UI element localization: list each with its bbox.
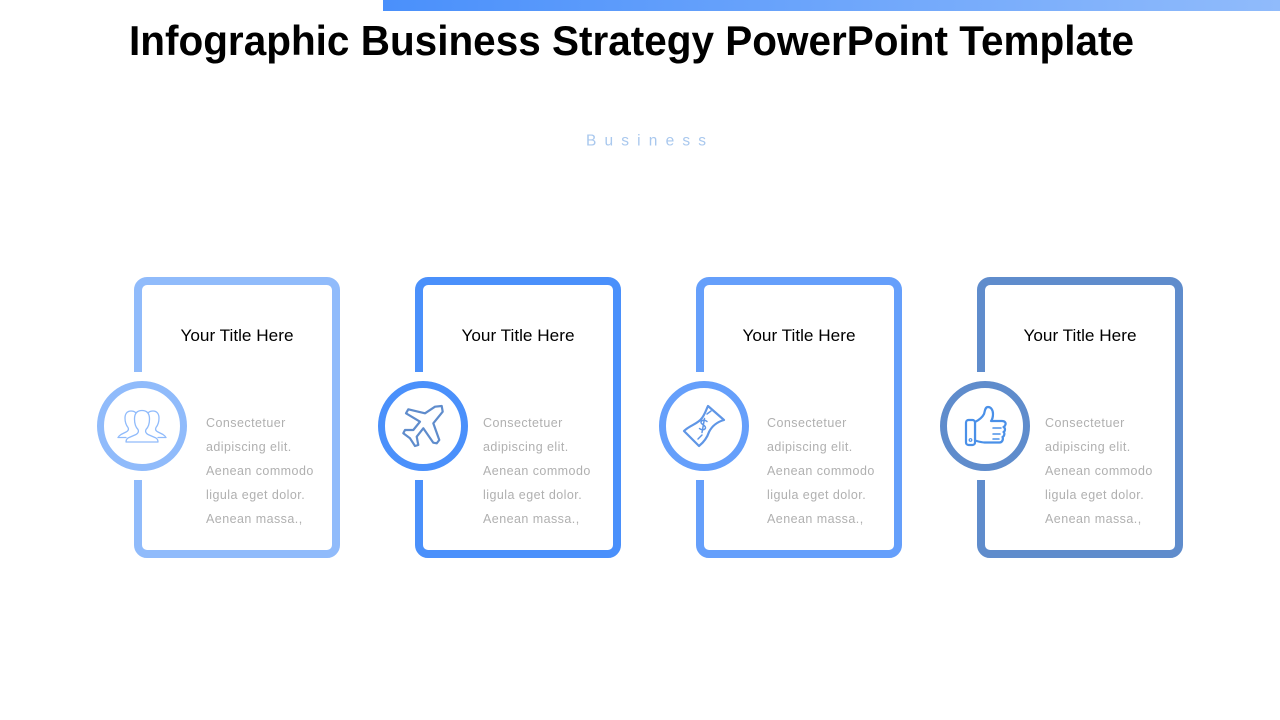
card 2 body text: Aenean commodo (483, 464, 591, 478)
panel: card 1 (100, 281, 336, 554)
card 3 body text: Aenean massa., (767, 512, 864, 526)
card 4 body text: Consectetuer (1045, 416, 1125, 430)
icon: airplane (403, 406, 443, 446)
card 2 frame (419, 281, 617, 554)
card 1 body text: Aenean commodo (206, 464, 314, 478)
card 2 body text: adipiscing elit. (483, 440, 569, 454)
card 1 body text (206, 416, 314, 526)
card 4 icon circle (944, 384, 1026, 468)
panel: card 3 (662, 281, 898, 554)
card 3 icon circle (662, 384, 746, 468)
card 2 body text: ligula eget dolor. (483, 488, 582, 502)
card 2 body text: Aenean massa., (483, 512, 580, 526)
title: Infographic Business Strategy PowerPoint Template (129, 17, 1134, 64)
subtitle: Business (586, 132, 706, 150)
card 4 body text: Aenean massa., (1045, 512, 1142, 526)
card 1 body text: Consectetuer (206, 416, 286, 430)
card 1 frame (138, 281, 336, 554)
card 2 icon circle (382, 384, 464, 468)
card 1 heading: Your Title Here (180, 327, 294, 345)
card 2 body text: Consectetuer (483, 416, 563, 430)
card 1 icon circle (100, 384, 184, 468)
icon: banknote (684, 406, 724, 446)
card 3 body text: adipiscing elit. (767, 440, 853, 454)
card 4 frame (981, 281, 1179, 554)
card 4 body text: Aenean commodo (1045, 464, 1153, 478)
card 3 body text: ligula eget dolor. (767, 488, 866, 502)
icon: thumbs up (966, 407, 1006, 445)
card 3 heading: Your Title Here (742, 327, 856, 345)
card 4 body text: adipiscing elit. (1045, 440, 1131, 454)
card 4 heading: Your Title Here (1024, 327, 1136, 345)
card 4 body text (1045, 416, 1153, 526)
card 3 frame (700, 281, 898, 554)
card 4 body text: ligula eget dolor. (1045, 488, 1144, 502)
panel: card 2 (382, 281, 617, 554)
icon: people (118, 410, 166, 442)
card 3 body text (767, 416, 875, 526)
card 2 heading: Your Title Here (462, 327, 574, 345)
card 3 body text: Consectetuer (767, 416, 847, 430)
card 1 body text: Aenean massa., (206, 512, 303, 526)
card 2 body text (483, 416, 591, 526)
top gradient bar (383, 0, 1280, 11)
card 1 body text: ligula eget dolor. (206, 488, 305, 502)
card 1 body text: adipiscing elit. (206, 440, 292, 454)
card 3 body text: Aenean commodo (767, 464, 875, 478)
panel: card 4 (944, 281, 1179, 554)
